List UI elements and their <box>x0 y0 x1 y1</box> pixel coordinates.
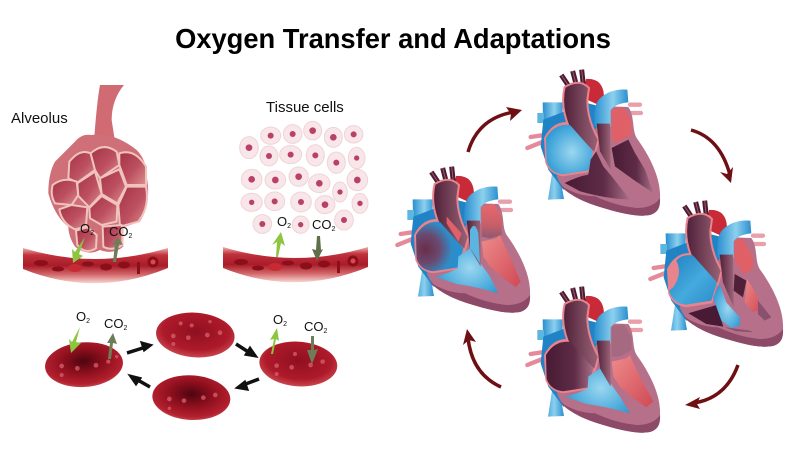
label: Alveolus: Alveolus <box>11 110 68 127</box>
alveolus illustration <box>48 85 148 253</box>
heart: left <box>397 167 530 313</box>
heart: bottom <box>527 287 660 433</box>
label: CO2: 2 <box>128 233 132 240</box>
arrow: O2 out of cell <box>270 328 279 354</box>
label: Tissue cells: Tissue cells <box>266 99 344 116</box>
label: O2: 2 <box>287 223 291 230</box>
arrow: O2 into vessel <box>72 237 85 263</box>
panel: alveolus <box>11 85 168 283</box>
arrow: CO2 out of vessel <box>111 237 123 262</box>
label: CO2: CO <box>109 224 128 239</box>
blood vessel <box>223 247 368 282</box>
label: O2: 2 <box>86 318 90 325</box>
arrow: top-left <box>468 107 522 152</box>
black cycle arrows <box>127 342 259 390</box>
arrow: bottom-right <box>685 365 738 409</box>
arrow: top-right <box>691 130 733 183</box>
arrow: O2 leaving vessel <box>272 232 285 257</box>
label: CO2: CO <box>304 319 324 334</box>
blood vessel <box>23 248 168 283</box>
label: O2: O <box>277 214 287 229</box>
panel: red blood cell cycle <box>44 309 339 422</box>
label: O2: O <box>76 309 86 324</box>
cell cluster <box>240 121 368 233</box>
label: O2: O <box>273 312 283 327</box>
arrow: CO2 out of cell <box>107 333 117 359</box>
label: CO2: 2 <box>124 325 128 332</box>
heart: right <box>650 201 783 347</box>
label: O2: 2 <box>90 230 94 237</box>
title: Oxygen Transfer and Adaptations <box>175 23 611 54</box>
label: CO2: CO <box>312 217 332 232</box>
panel: heart cycle <box>397 70 783 433</box>
arrow: O2 into cell <box>69 327 81 353</box>
label: CO2: CO <box>104 316 124 331</box>
arrow: CO2 into cell <box>307 336 318 364</box>
heart: top <box>527 70 660 216</box>
panel: tissue cells <box>223 99 368 282</box>
label: CO2: 2 <box>332 226 336 233</box>
red blood cells <box>44 310 339 422</box>
label: O2: 2 <box>283 321 287 328</box>
label: CO2: 2 <box>324 328 328 335</box>
arrow: CO2 entering vessel <box>312 236 323 261</box>
arrow: bottom-left <box>463 329 501 387</box>
label: O2: O <box>80 221 90 236</box>
